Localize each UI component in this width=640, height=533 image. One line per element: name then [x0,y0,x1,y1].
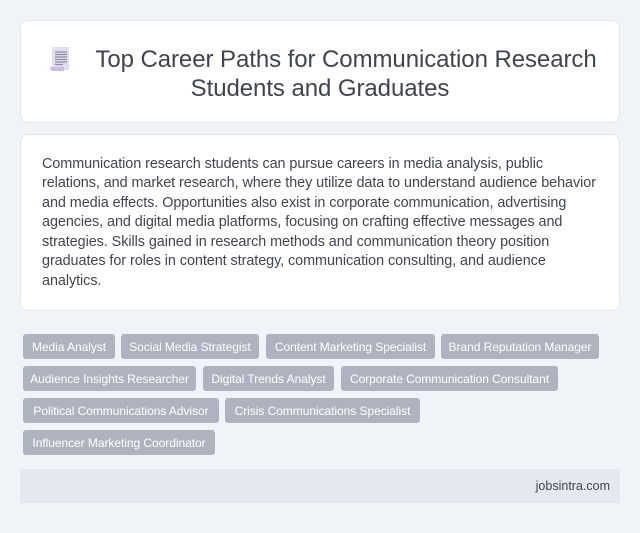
career tags: Digital Trends Analyst [211,372,326,386]
career tags: Influencer Marketing Coordinator [32,436,206,450]
footer bar [20,469,620,503]
title [95,46,597,102]
footer source text: jobsintra.com [536,479,610,493]
career tags: Brand Reputation Manager [449,340,591,354]
career tags: Media Analyst [32,340,106,354]
career tags: Audience Insights Researcher [30,372,189,386]
panel: summary paragraph: relations, and market research, where they utilize data to understand audience behavior [42,175,596,191]
panel: header [20,20,620,123]
panel: summary paragraph: agencies, and digital media platforms, focusing on crafting effective messages and [42,214,562,230]
career tags [23,334,599,455]
panel: summary paragraph: analytics. [42,273,101,289]
panel: summary paragraph: and media effects. Opportunities also exist in corporate communication, advertising [42,195,566,211]
career tags: Crisis Communications Specialist [235,404,410,418]
panel: summary paragraph [20,134,620,311]
icon: document scroll [50,47,69,71]
panel: summary paragraph: graduates for roles in content strategy, communication consulting, and audience [42,253,546,269]
career tags: Social Media Strategist [129,340,251,354]
panel: summary paragraph: strategies. Skills gained in research methods and communication theory position [42,234,549,250]
career tags: Corporate Communication Consultant [350,372,549,386]
career tags: Content Marketing Specialist [275,340,426,354]
title: Students and Graduates [191,75,449,102]
title: Top Career Paths for Communication Research [95,46,597,73]
panel: summary paragraph: Communication research students can pursue careers in media analysis, public [42,156,543,172]
career tags: Political Communications Advisor [33,404,209,418]
